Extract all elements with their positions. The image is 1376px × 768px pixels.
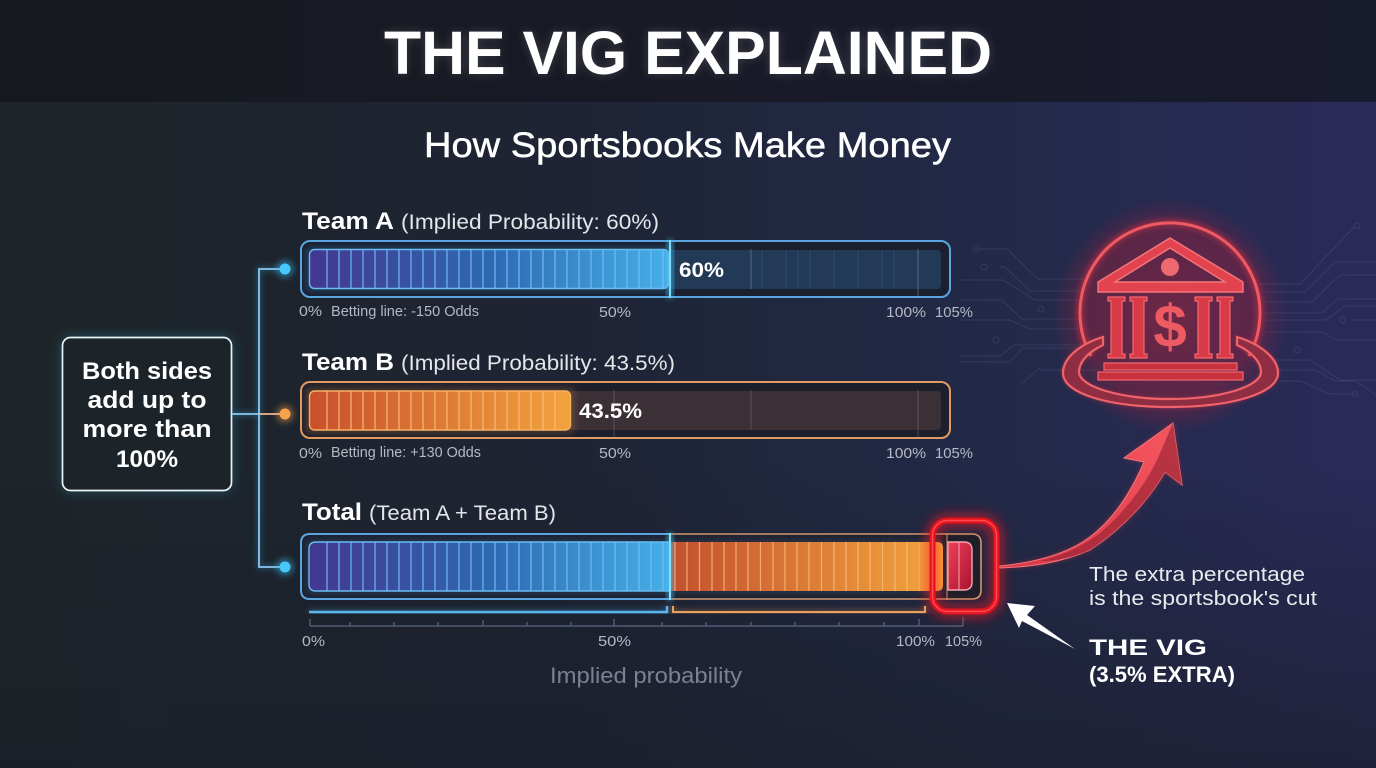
axis labels: team B: Betting line: +130 Odds [331,444,481,461]
segment: team B share [670,542,943,591]
callout: both sides add up to more than 100% [62,337,232,491]
axis: total scale: 105% [945,633,982,650]
header band [0,0,1376,102]
axis labels: team B: 50% [599,445,631,462]
text: the vig label: THE VIG [1089,635,1207,660]
callout: both sides add up to more than 100%: more than [82,416,212,443]
heading: team B: (Implied Probability: 43.5%) [401,352,675,375]
callout: both sides add up to more than 100%: 100% [116,446,178,473]
panel: team B [299,349,973,462]
icon: bank with dollar sign [1052,198,1288,434]
value: 60%: 60% [679,259,724,282]
building [1098,238,1243,380]
arrow: white pointer to vig [1007,603,1075,649]
panel: team A [299,208,973,321]
circuit board background [960,223,1376,397]
building: $ [1153,293,1187,360]
subtitle: How Sportsbooks Make Money [424,126,952,165]
base ring [1063,337,1278,407]
heading: team A: (Implied Probability: 60%) [401,211,659,234]
heading: total: (Team A + Team B) [369,502,556,525]
axis labels: team B: 100% [886,445,926,462]
arrow: vig to sportsbook [1000,423,1182,568]
axis labels: team A [299,303,973,321]
dome ring [1080,223,1260,356]
text: extra percentage note: is the sportsbook's cut [1089,588,1318,610]
bar: team A 60% [301,240,950,298]
axis labels: team A: 100% [886,304,926,321]
text: the vig label [1089,635,1235,687]
axis title: Implied probability [550,663,742,688]
bracket: team B [673,606,925,612]
bar: total stacked [301,533,981,600]
text: the vig label: (3.5% EXTRA) [1089,662,1235,687]
axis labels: team A: 50% [599,304,631,321]
heading: team B: Team B [302,349,394,376]
callout: both sides add up to more than 100%: Both sides [82,358,212,385]
heading: total [302,499,556,526]
axis labels: team B: 0% [299,445,322,462]
segment: vig excess [948,542,972,590]
heading: team A [302,208,659,235]
title: THE VIG EXPLAINED [384,19,992,87]
bar: team B 43.5% [301,382,950,438]
heading: total: Total [302,499,362,526]
glow [1052,198,1288,434]
text: extra percentage note [1089,564,1318,610]
bracket: team A [309,606,667,612]
axis: total scale: 50% [598,633,631,650]
axis: total scale: 0% [302,633,325,650]
heading: team B [302,349,675,376]
value: 43.5%: 43.5% [579,400,642,423]
axis labels: team A: 0% [299,303,322,320]
segment: team A share [309,542,670,591]
heading: team A: Team A [302,208,394,235]
axis labels: team B [299,444,973,462]
callout: both sides add up to more than 100%: add up to [88,387,206,414]
red highlight box [932,520,996,612]
axis labels: team A: Betting line: -150 Odds [331,303,479,320]
axis: total scale: 100% [896,633,935,650]
axis: total scale [302,617,982,650]
axis labels: team A: 105% [935,304,973,321]
connector lines [232,260,294,576]
axis labels: team B: 105% [935,445,973,462]
text: extra percentage note: The extra percentage [1089,564,1305,586]
panel: total [301,499,996,688]
